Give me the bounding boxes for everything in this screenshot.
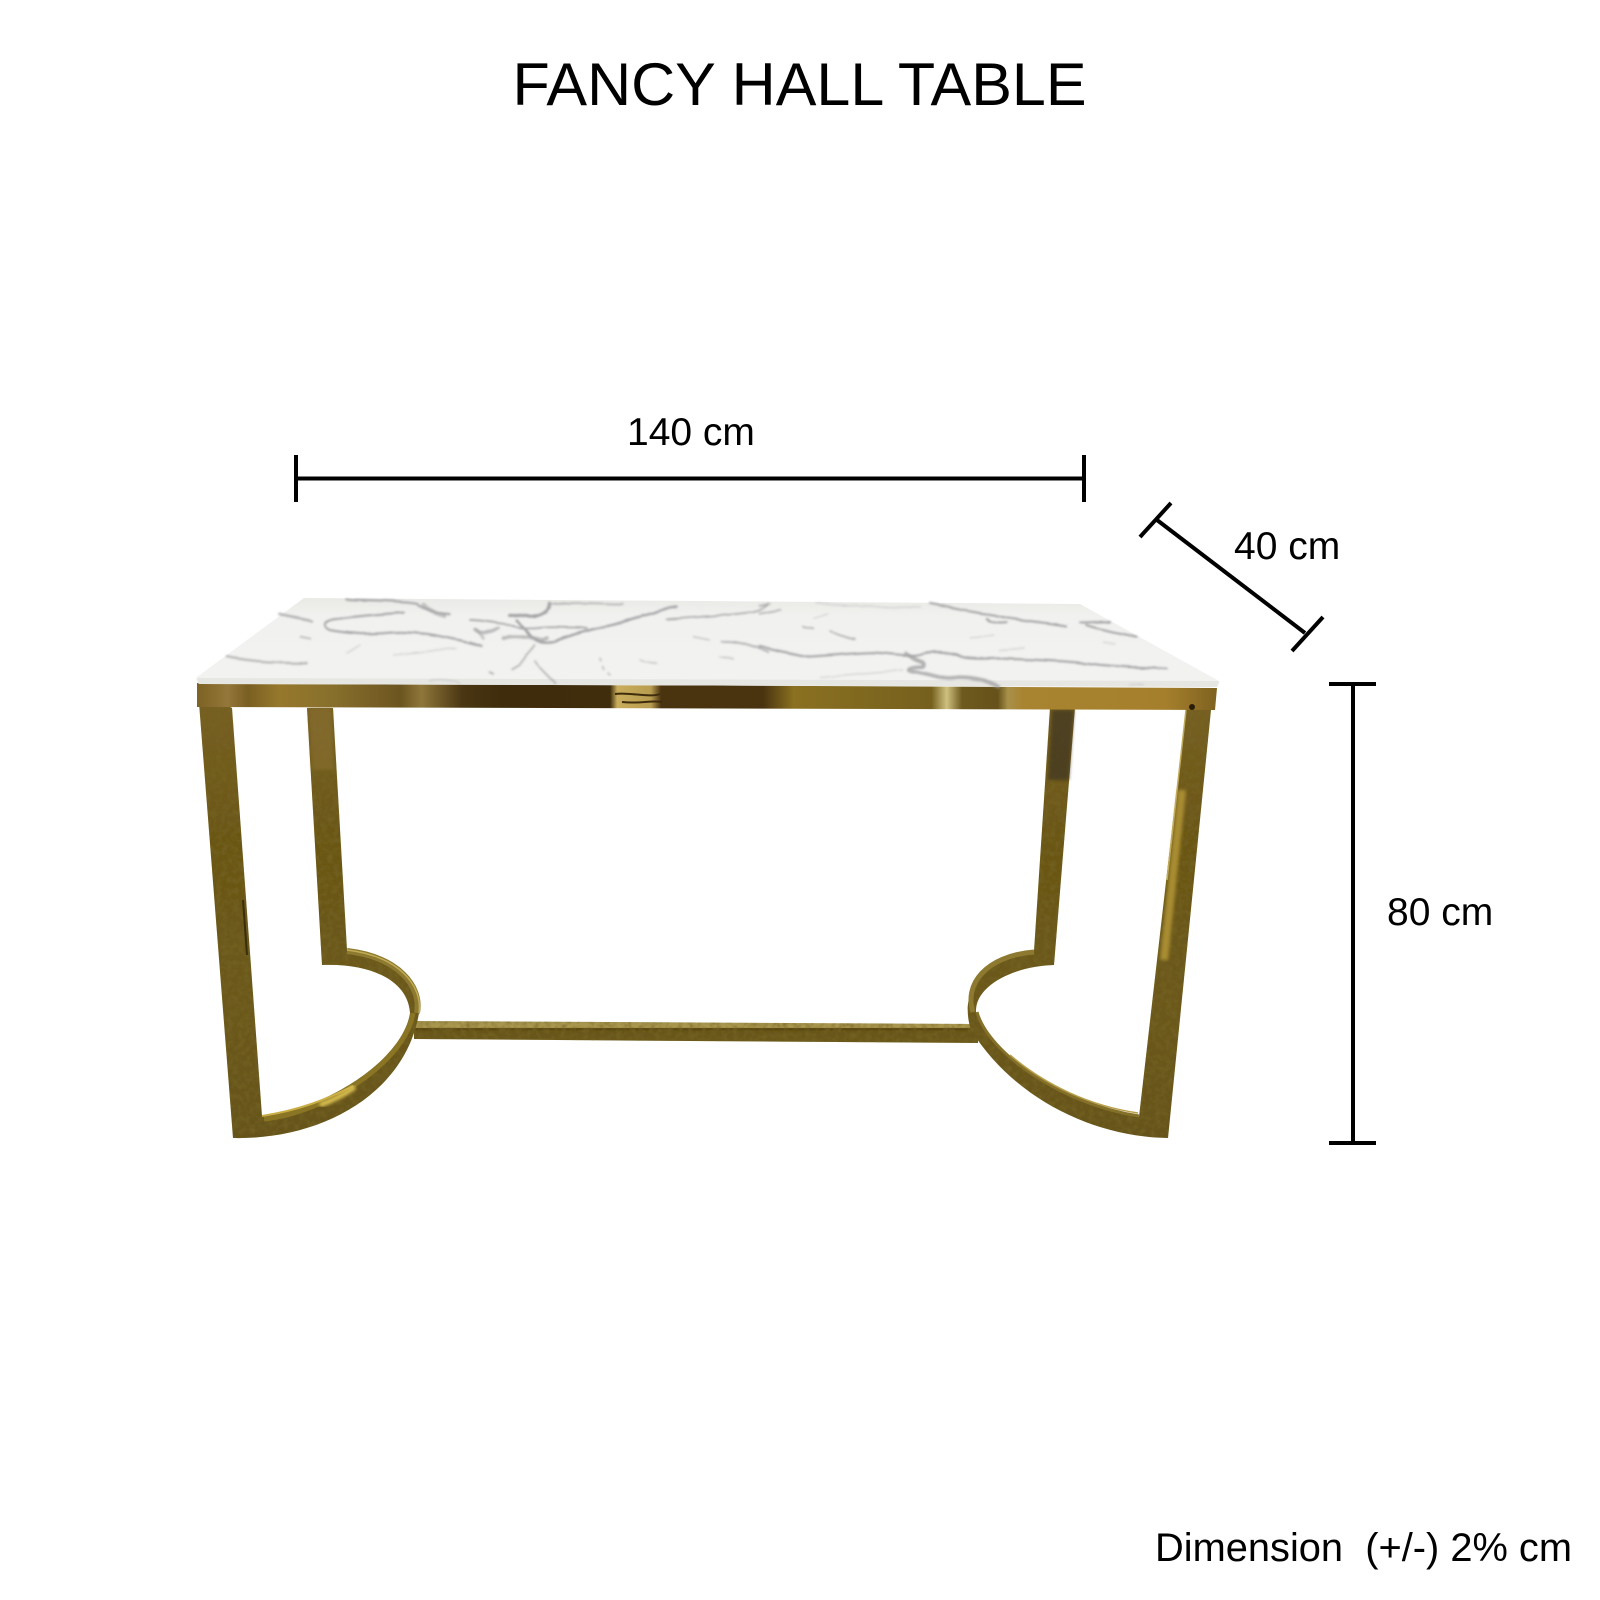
- height dimension: 80 cm: [1329, 684, 1493, 1143]
- marble veins: [227, 599, 1167, 686]
- right leg frame: [968, 690, 1213, 1138]
- depth measure line: [1140, 503, 1323, 651]
- depth label: 40 cm: [1234, 525, 1340, 568]
- depth dimension: 40 cm: [1140, 503, 1340, 651]
- width label: 140 cm: [627, 411, 755, 454]
- gold top rail: [197, 683, 1217, 710]
- rear leg shading: [309, 708, 1074, 780]
- width measure line: [296, 455, 1084, 502]
- left leg frame: [198, 690, 419, 1138]
- crossbar: [414, 1021, 978, 1043]
- veins: center section: [470, 603, 768, 683]
- veins: right section: [760, 603, 1167, 686]
- veins: left section: [227, 599, 483, 683]
- slab front edge: [197, 678, 1219, 687]
- height measure line: [1329, 684, 1376, 1143]
- tolerance note: Dimension (+/-) 2% cm: [1155, 1526, 1572, 1570]
- title: FANCY HALL TABLE: [512, 51, 1086, 118]
- marble top surface: [196, 598, 1219, 687]
- height label: 80 cm: [1387, 891, 1493, 934]
- width dimension: 140 cm: [296, 411, 1084, 502]
- marble tabletop: [196, 598, 1219, 687]
- table illustration: [196, 598, 1219, 1138]
